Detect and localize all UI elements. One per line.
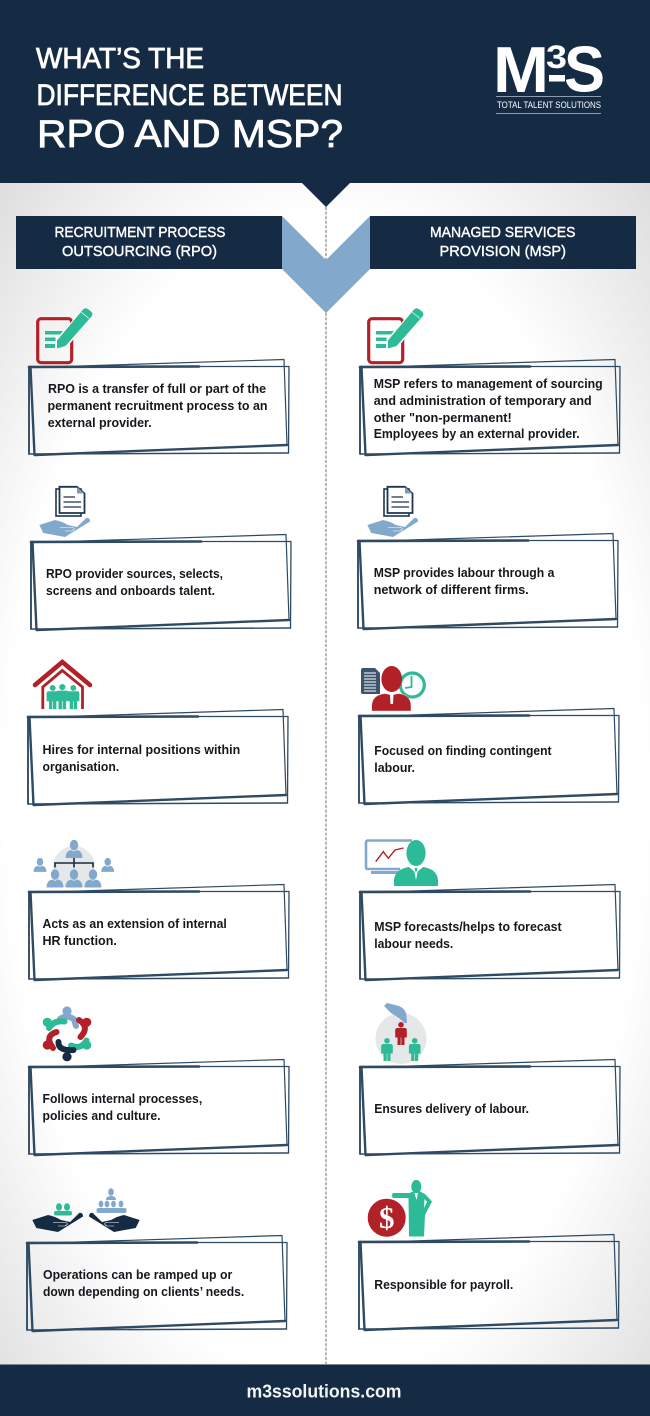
blue chevron [282,216,370,313]
card: delivery of labour [360,1060,620,1155]
icon: hand picking person [376,1003,426,1064]
card: forecast labour [360,884,620,980]
center dashed divider [325,207,327,1364]
card: MSP definition: and administration of temporary and [374,393,592,408]
icon: form and pencil (MSP) [369,308,423,363]
header panel [0,0,650,207]
right column heading: PROVISION (MSP) [440,243,566,260]
icon: hands holding groups [32,1188,140,1232]
card: MSP definition [360,360,620,455]
icon: org chart [34,840,114,888]
icon: dollar coin and person: $ [379,1200,394,1235]
card: HR extension [29,884,289,980]
icon: monitor and presenter [366,840,438,886]
footer bar: m3ssolutions.com [246,1382,402,1402]
card: RPO sourcing [31,534,291,630]
card: RPO definition: RPO is a transfer of full or part of the [48,381,266,396]
left column heading: OUTSOURCING (RPO) [62,243,217,260]
card: RPO definition: permanent recruitment process to an [48,398,268,413]
icon: circle of people [43,1006,91,1061]
card: payroll [359,1234,619,1330]
card: RPO definition: external provider. [48,415,152,430]
logo [493,32,605,114]
left column heading: RECRUITMENT PROCESS [54,224,226,241]
title [36,43,343,156]
footer bar [0,1364,650,1416]
card: HR extension: Acts as an extension of internal [42,916,227,931]
icon: document in hand (MSP) [367,487,418,537]
logo: 3 [546,39,567,75]
card: MSP labour network: MSP provides labour through a [374,565,555,580]
icon: person with document and clock [361,666,424,711]
card: forecast labour: MSP forecasts/helps to forecast [374,919,562,934]
card: delivery of labour: Ensures delivery of labour. [374,1101,529,1116]
icon: dollar coin and person [368,1180,432,1237]
card: internal positions: Hires for internal positions within [42,742,240,757]
icon: form and pencil (RPO) [38,308,92,363]
logo: S [564,32,605,106]
card: internal processes: policies and culture. [42,1108,160,1123]
icon: house with people [35,662,90,709]
card: ramp up or down: down depending on clients’ needs. [43,1284,244,1299]
card: contingent labour: Focused on finding contingent [374,743,552,758]
right column heading: MANAGED SERVICES [430,224,576,241]
card: MSP labour network [358,534,618,629]
card: HR extension: HR function. [42,933,117,948]
icon: document in hand (RPO) [39,487,90,537]
card: RPO definition [29,360,289,455]
card: forecast labour: labour needs. [374,936,453,951]
logo: TOTAL TALENT SOLUTIONS [497,100,601,111]
title: DIFFERENCE BETWEEN [36,79,342,112]
card: MSP labour network: network of different firms. [374,582,529,597]
right column heading [370,216,636,269]
card: RPO sourcing: screens and onboards talent. [46,583,215,598]
card: contingent labour [359,708,619,804]
card: MSP definition: other "non-permanent! [374,410,512,425]
card: internal processes [29,1060,289,1155]
title: WHAT’S THE [36,43,204,75]
card: MSP definition: Employees by an external provider. [374,426,580,441]
card: MSP definition: MSP refers to management of sourcing [374,376,603,391]
title: RPO AND MSP? [37,113,343,156]
logo: M [493,33,549,106]
card: payroll: Responsible for payroll. [374,1277,513,1292]
card: RPO sourcing: RPO provider sources, selects, [46,566,223,581]
card: contingent labour: labour. [374,760,415,775]
card: internal positions [28,710,288,805]
card: ramp up or down [27,1236,287,1331]
left column heading [16,216,282,269]
card: internal processes: Follows internal processes, [42,1091,202,1106]
card: internal positions: organisation. [42,759,119,774]
card: ramp up or down: Operations can be ramped up or [43,1267,232,1282]
